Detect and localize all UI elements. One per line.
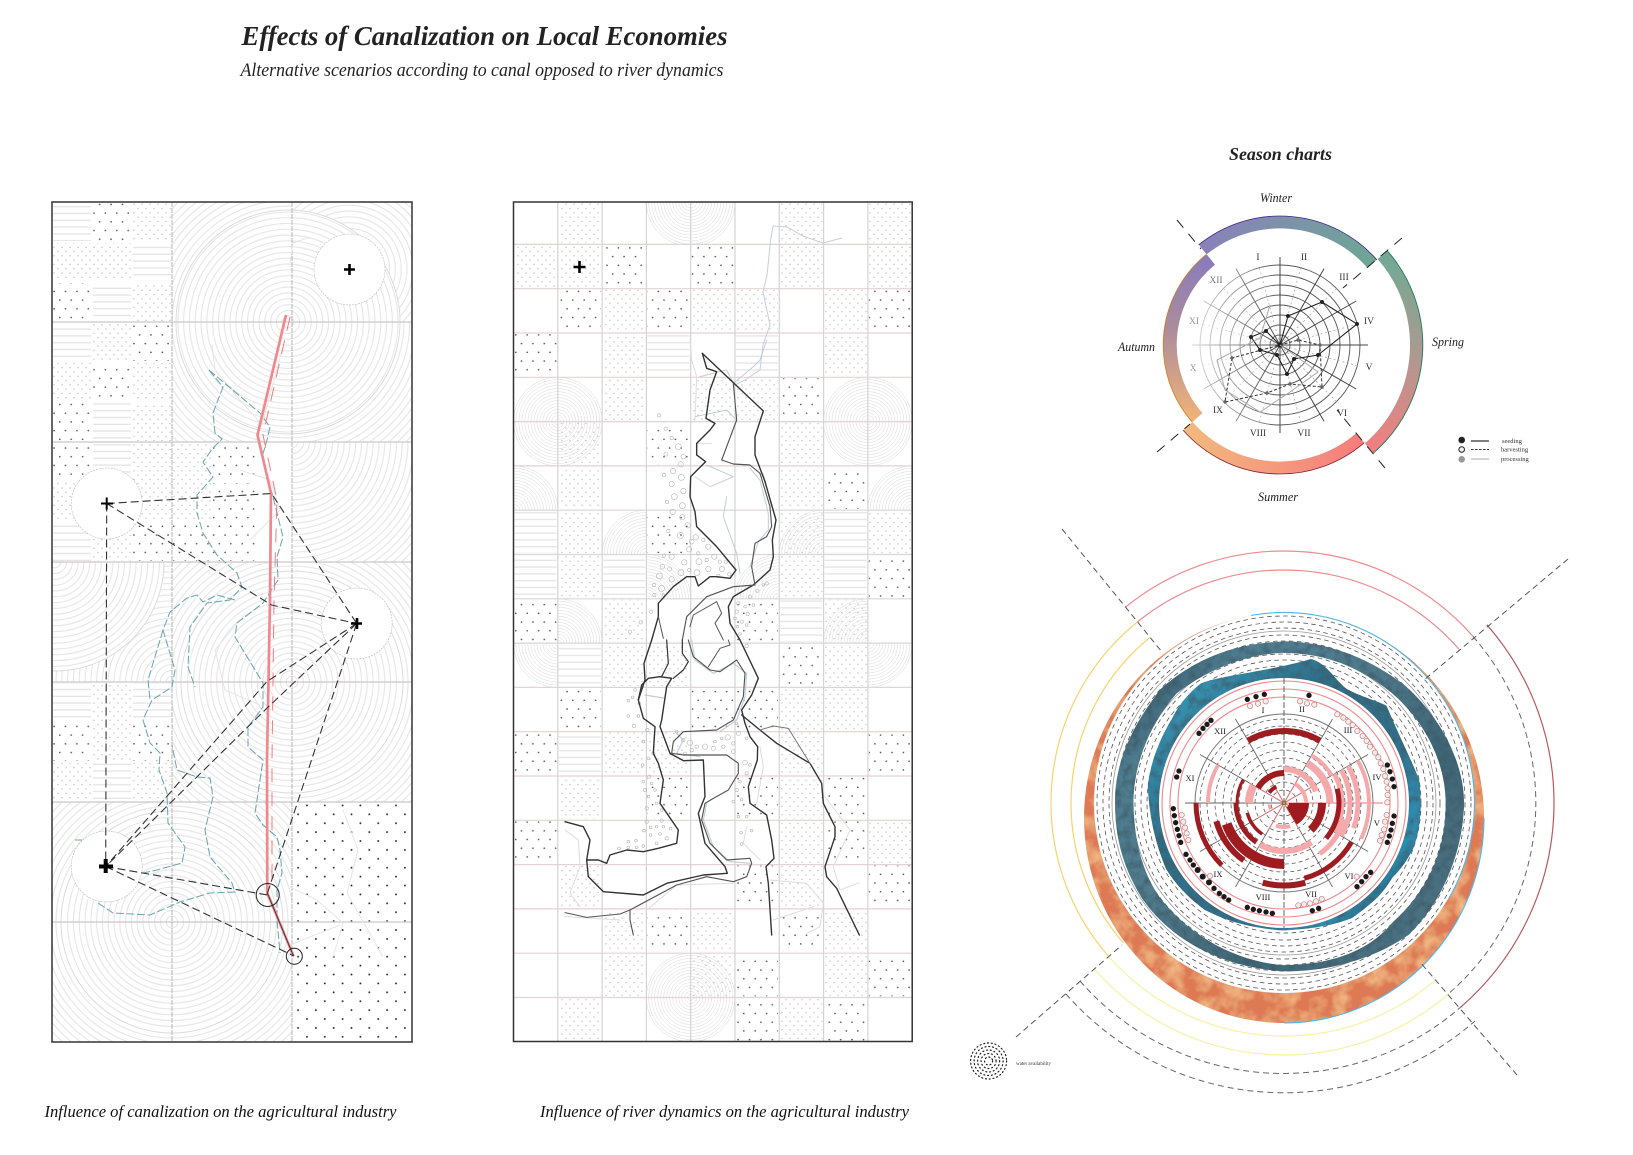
floodplain bubbles	[618, 414, 768, 850]
month labels: VI	[1337, 409, 1347, 419]
month labels: XII	[1214, 726, 1226, 736]
month labels: VIII	[1256, 892, 1270, 902]
red horizontal and inner spokes	[1258, 777, 1383, 829]
solid grey rings	[1112, 631, 1456, 975]
month labels	[1186, 704, 1382, 902]
radial month grid	[1192, 257, 1368, 433]
season labels: Spring	[1432, 335, 1464, 349]
month labels: VIII	[1250, 429, 1266, 439]
legend: water availability: water availability	[1016, 1061, 1051, 1067]
month labels: V	[1374, 818, 1381, 828]
patterned cells	[514, 203, 911, 1040]
background patterned cells	[53, 203, 412, 1042]
pink rings	[1162, 681, 1406, 925]
panel: river dynamics map	[469, 158, 956, 1042]
concentric field patterns	[0, 72, 546, 1119]
caption: canalization: Influence of canalization on the agricultural industry	[43, 1102, 397, 1121]
faint previous river traces	[212, 237, 383, 957]
month labels: IV	[1364, 317, 1374, 327]
canal: red line	[258, 315, 294, 956]
connection network: dashed	[106, 494, 357, 956]
month labels: XI	[1189, 317, 1199, 327]
processing line	[1217, 305, 1318, 412]
inner radial chart	[1160, 678, 1408, 928]
subtitle: Alternative scenarios according to canal opposed to river dynamics	[239, 61, 724, 81]
season boundary dashes	[1157, 220, 1402, 468]
month labels: VI	[1345, 871, 1354, 881]
month labels: III	[1344, 725, 1352, 735]
month labels: IX	[1213, 406, 1223, 416]
season labels: Winter	[1260, 191, 1292, 205]
month labels: II	[1299, 704, 1305, 714]
node circles	[256, 884, 302, 964]
panel frame	[52, 202, 412, 1042]
settlement cross	[574, 261, 586, 273]
harvesting line	[1223, 338, 1324, 404]
caption: river dynamics: Influence of river dynamics on the agricultural industry	[539, 1102, 910, 1121]
month labels: II	[1301, 253, 1307, 263]
pink activity arcs	[1168, 687, 1400, 919]
left-side fade overlay	[1189, 254, 1280, 436]
blue edge	[1063, 582, 1505, 1024]
inner water band	[1148, 659, 1421, 930]
inner white disc	[1159, 678, 1409, 928]
season labels	[1117, 191, 1464, 504]
river trace: teal dashed	[75, 370, 283, 953]
season labels: Autumn	[1117, 340, 1155, 354]
chart: season wheel	[1078, 143, 1482, 547]
month labels: VII	[1297, 429, 1311, 439]
month labels: IV	[1373, 772, 1382, 782]
legend: season chart: processing	[1501, 456, 1530, 463]
spokes	[1185, 678, 1368, 928]
river channels, lower section	[565, 640, 859, 935]
grid lines	[52, 202, 412, 1042]
legend: water availability	[971, 1043, 1051, 1079]
settlement crosses	[99, 264, 362, 873]
seeding line	[1249, 300, 1359, 376]
outer seasonal arcs	[903, 422, 1633, 1155]
river channels, upper section	[652, 340, 776, 640]
upstream faint river	[733, 226, 842, 386]
dashed disc	[1094, 613, 1474, 993]
month labels	[1189, 253, 1374, 439]
settlement discs	[71, 234, 392, 902]
dashed season axes	[1016, 529, 1568, 1075]
month labels: XI	[1186, 773, 1195, 783]
month labels: VII	[1305, 889, 1317, 899]
dashed rings	[1200, 719, 1368, 887]
grid lines	[514, 202, 912, 1041]
orange crescent	[1084, 613, 1484, 1023]
season ring segments	[1078, 143, 1482, 547]
dark red activity arcs	[1160, 679, 1408, 927]
outer water band	[1115, 641, 1464, 971]
panel: canalization map	[0, 72, 546, 1119]
month labels: IX	[1214, 869, 1222, 879]
month labels: III	[1339, 273, 1349, 283]
month labels: I	[1256, 253, 1260, 263]
legend: season chart	[1458, 437, 1530, 463]
activity dots	[1171, 692, 1397, 916]
grey ring	[1195, 714, 1373, 892]
month labels: I	[1262, 705, 1265, 715]
legend: season chart: harvesting	[1501, 446, 1529, 454]
month labels: XII	[1209, 276, 1223, 286]
outer dashed rings	[1097, 616, 1471, 990]
panel frame	[514, 202, 912, 1042]
month labels: V	[1366, 363, 1373, 373]
concentric circle patterns	[469, 158, 956, 1042]
season labels: Summer	[1258, 490, 1298, 504]
legend: season chart: seeding	[1502, 438, 1523, 445]
centre mark	[1282, 801, 1286, 805]
month labels: X	[1190, 364, 1197, 374]
title: Effects of Canalization on Local Economies	[241, 21, 728, 51]
chart: water availability	[903, 422, 1633, 1155]
heading: season charts: Season charts	[1229, 144, 1332, 164]
